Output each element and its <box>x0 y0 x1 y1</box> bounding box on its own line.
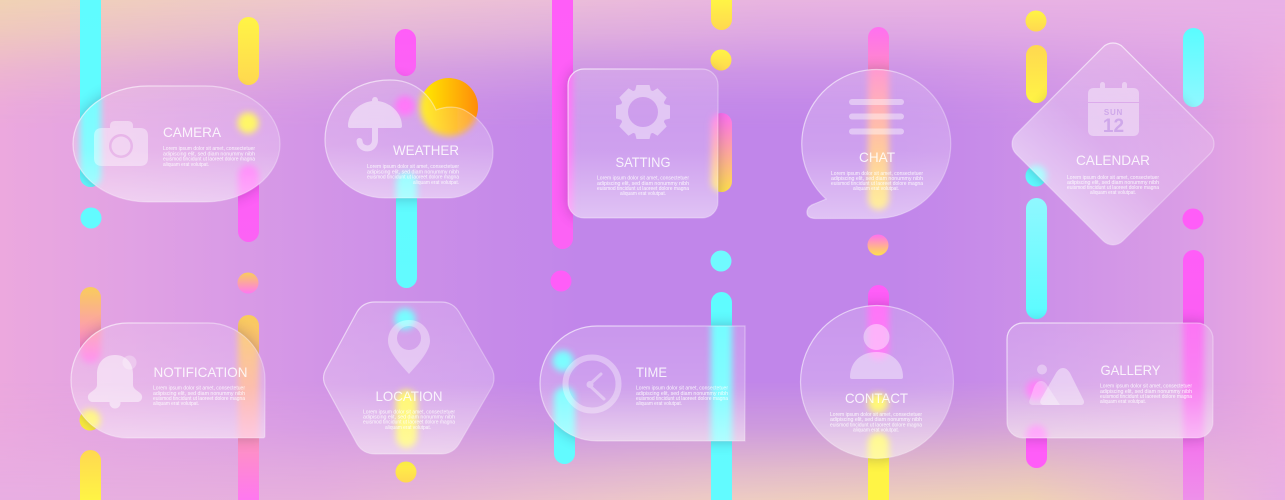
heading: notification: NOTIFICATION <box>154 364 248 380</box>
icon: bell <box>88 355 142 408</box>
text block: setting: adipiscing elit, sed diam nonummy nibh <box>597 181 689 187</box>
icon: calendar: SUN <box>1104 108 1123 117</box>
text block: chat: adipiscing elit, sed diam nonummy nibh <box>831 176 923 182</box>
text block: camera: Lorem ipsum dolor sit amet, consectetuer <box>163 146 255 152</box>
panel: notification <box>71 323 265 438</box>
heading: time: TIME <box>636 364 667 380</box>
heading: location: LOCATION <box>376 388 442 404</box>
icon: image <box>1029 364 1084 405</box>
icon: menu lines <box>849 99 904 134</box>
panel: gallery <box>1007 323 1213 438</box>
text block: gallery: adipiscing elit, sed diam nonummy nibh <box>1100 389 1192 395</box>
text block: setting: aliquam erat volutpat. <box>620 191 666 197</box>
text block: location <box>363 410 455 431</box>
text block: location: adipiscing elit, sed diam nonummy nibh <box>363 415 455 421</box>
text block: calendar: Lorem ipsum dolor sit amet, consectetuer <box>1067 175 1159 181</box>
text block: gallery: Lorem ipsum dolor sit amet, consectetuer <box>1100 384 1192 390</box>
text block: notification <box>153 386 245 407</box>
icon: umbrella <box>348 97 402 148</box>
text block: calendar <box>1067 175 1159 196</box>
text block: contact: euismod tincidunt ut laoreet dolore magna <box>830 422 922 428</box>
text block: contact: Lorem ipsum dolor sit amet, consectetuer <box>830 412 922 418</box>
panel: location <box>324 302 494 454</box>
text block: time: adipiscing elit, sed diam nonummy nibh <box>636 391 728 397</box>
panel: setting <box>568 69 718 218</box>
text block: weather: adipiscing elit, sed diam nonummy nibh <box>367 169 459 175</box>
text block: weather <box>367 164 459 186</box>
icon: camera <box>94 121 148 166</box>
heading: camera: CAMERA <box>163 124 222 140</box>
text block: notification: adipiscing elit, sed diam nonummy nibh <box>153 391 245 397</box>
icon: sun <box>420 78 478 136</box>
icon: person <box>850 324 903 379</box>
text block: notification: aliquam erat volutpat. <box>153 401 199 407</box>
text block: contact: aliquam erat volutpat. <box>853 428 899 434</box>
icon: calendar <box>1088 82 1139 137</box>
text block: weather: euismod tincidunt ut laoreet dolore magna <box>367 175 459 181</box>
text block: gallery <box>1100 384 1192 405</box>
text block: location: aliquam erat volutpat. <box>385 425 431 431</box>
text block: time: Lorem ipsum dolor sit amet, consectetuer <box>636 386 728 392</box>
heading: gallery: GALLERY <box>1100 362 1161 378</box>
text block: contact <box>830 412 922 434</box>
icon: clock <box>566 358 618 410</box>
text block: camera: aliquam erat volutpat. <box>163 162 209 168</box>
text block: weather: aliquam erat volutpat. <box>413 180 459 186</box>
text block: location: euismod tincidunt ut laoreet dolore magna <box>363 420 455 426</box>
text block: setting <box>597 176 689 197</box>
panel: chat <box>802 70 951 218</box>
heading: calendar: CALENDAR <box>1076 152 1150 168</box>
panel: camera <box>73 86 280 202</box>
text block: location: Lorem ipsum dolor sit amet, consectetuer <box>363 410 455 416</box>
heading: weather: WEATHER <box>393 142 459 158</box>
text block: setting: Lorem ipsum dolor sit amet, consectetuer <box>597 176 689 182</box>
text block: gallery: aliquam erat volutpat. <box>1100 399 1146 405</box>
text block: time <box>636 386 728 407</box>
heading: contact: CONTACT <box>845 390 908 406</box>
text block: calendar: euismod tincidunt ut laoreet dolore magna <box>1067 185 1159 191</box>
text block: setting: euismod tincidunt ut laoreet dolore magna <box>597 186 689 192</box>
text block: chat: euismod tincidunt ut laoreet dolore magna <box>831 181 923 187</box>
text block: calendar: adipiscing elit, sed diam nonummy nibh <box>1067 180 1159 186</box>
text block: camera: adipiscing elit, sed diam nonummy nibh <box>163 151 255 157</box>
panel: time <box>540 326 745 441</box>
icon: calendar: 12 <box>1103 116 1124 137</box>
text block: camera <box>163 146 255 168</box>
panel: contact <box>800 306 954 458</box>
heading: chat: CHAT <box>859 149 895 165</box>
text block: chat: aliquam erat volutpat. <box>853 186 899 192</box>
text block: gallery: euismod tincidunt ut laoreet dolore magna <box>1100 394 1192 400</box>
text block: weather: Lorem ipsum dolor sit amet, consectetuer <box>367 164 459 170</box>
panel: weather <box>325 80 493 198</box>
text block: notification: Lorem ipsum dolor sit amet, consectetuer <box>153 386 245 392</box>
icon: map pin <box>388 320 430 374</box>
panel: calendar <box>1006 37 1220 251</box>
text block: calendar: aliquam erat volutpat. <box>1090 190 1136 196</box>
text block: time: aliquam erat volutpat. <box>636 401 682 407</box>
text block: time: euismod tincidunt ut laoreet dolore magna <box>636 396 728 402</box>
text block: contact: adipiscing elit, sed diam nonummy nibh <box>830 417 922 423</box>
text block: notification: euismod tincidunt ut laoreet dolore magna <box>153 396 245 402</box>
icon: gear <box>616 85 670 139</box>
text block: chat <box>831 171 923 192</box>
text block: camera: euismod tincidunt ut laoreet dolore magna <box>163 157 255 163</box>
text block: chat: Lorem ipsum dolor sit amet, consectetuer <box>831 171 923 177</box>
heading: setting: SATTING <box>616 154 670 170</box>
